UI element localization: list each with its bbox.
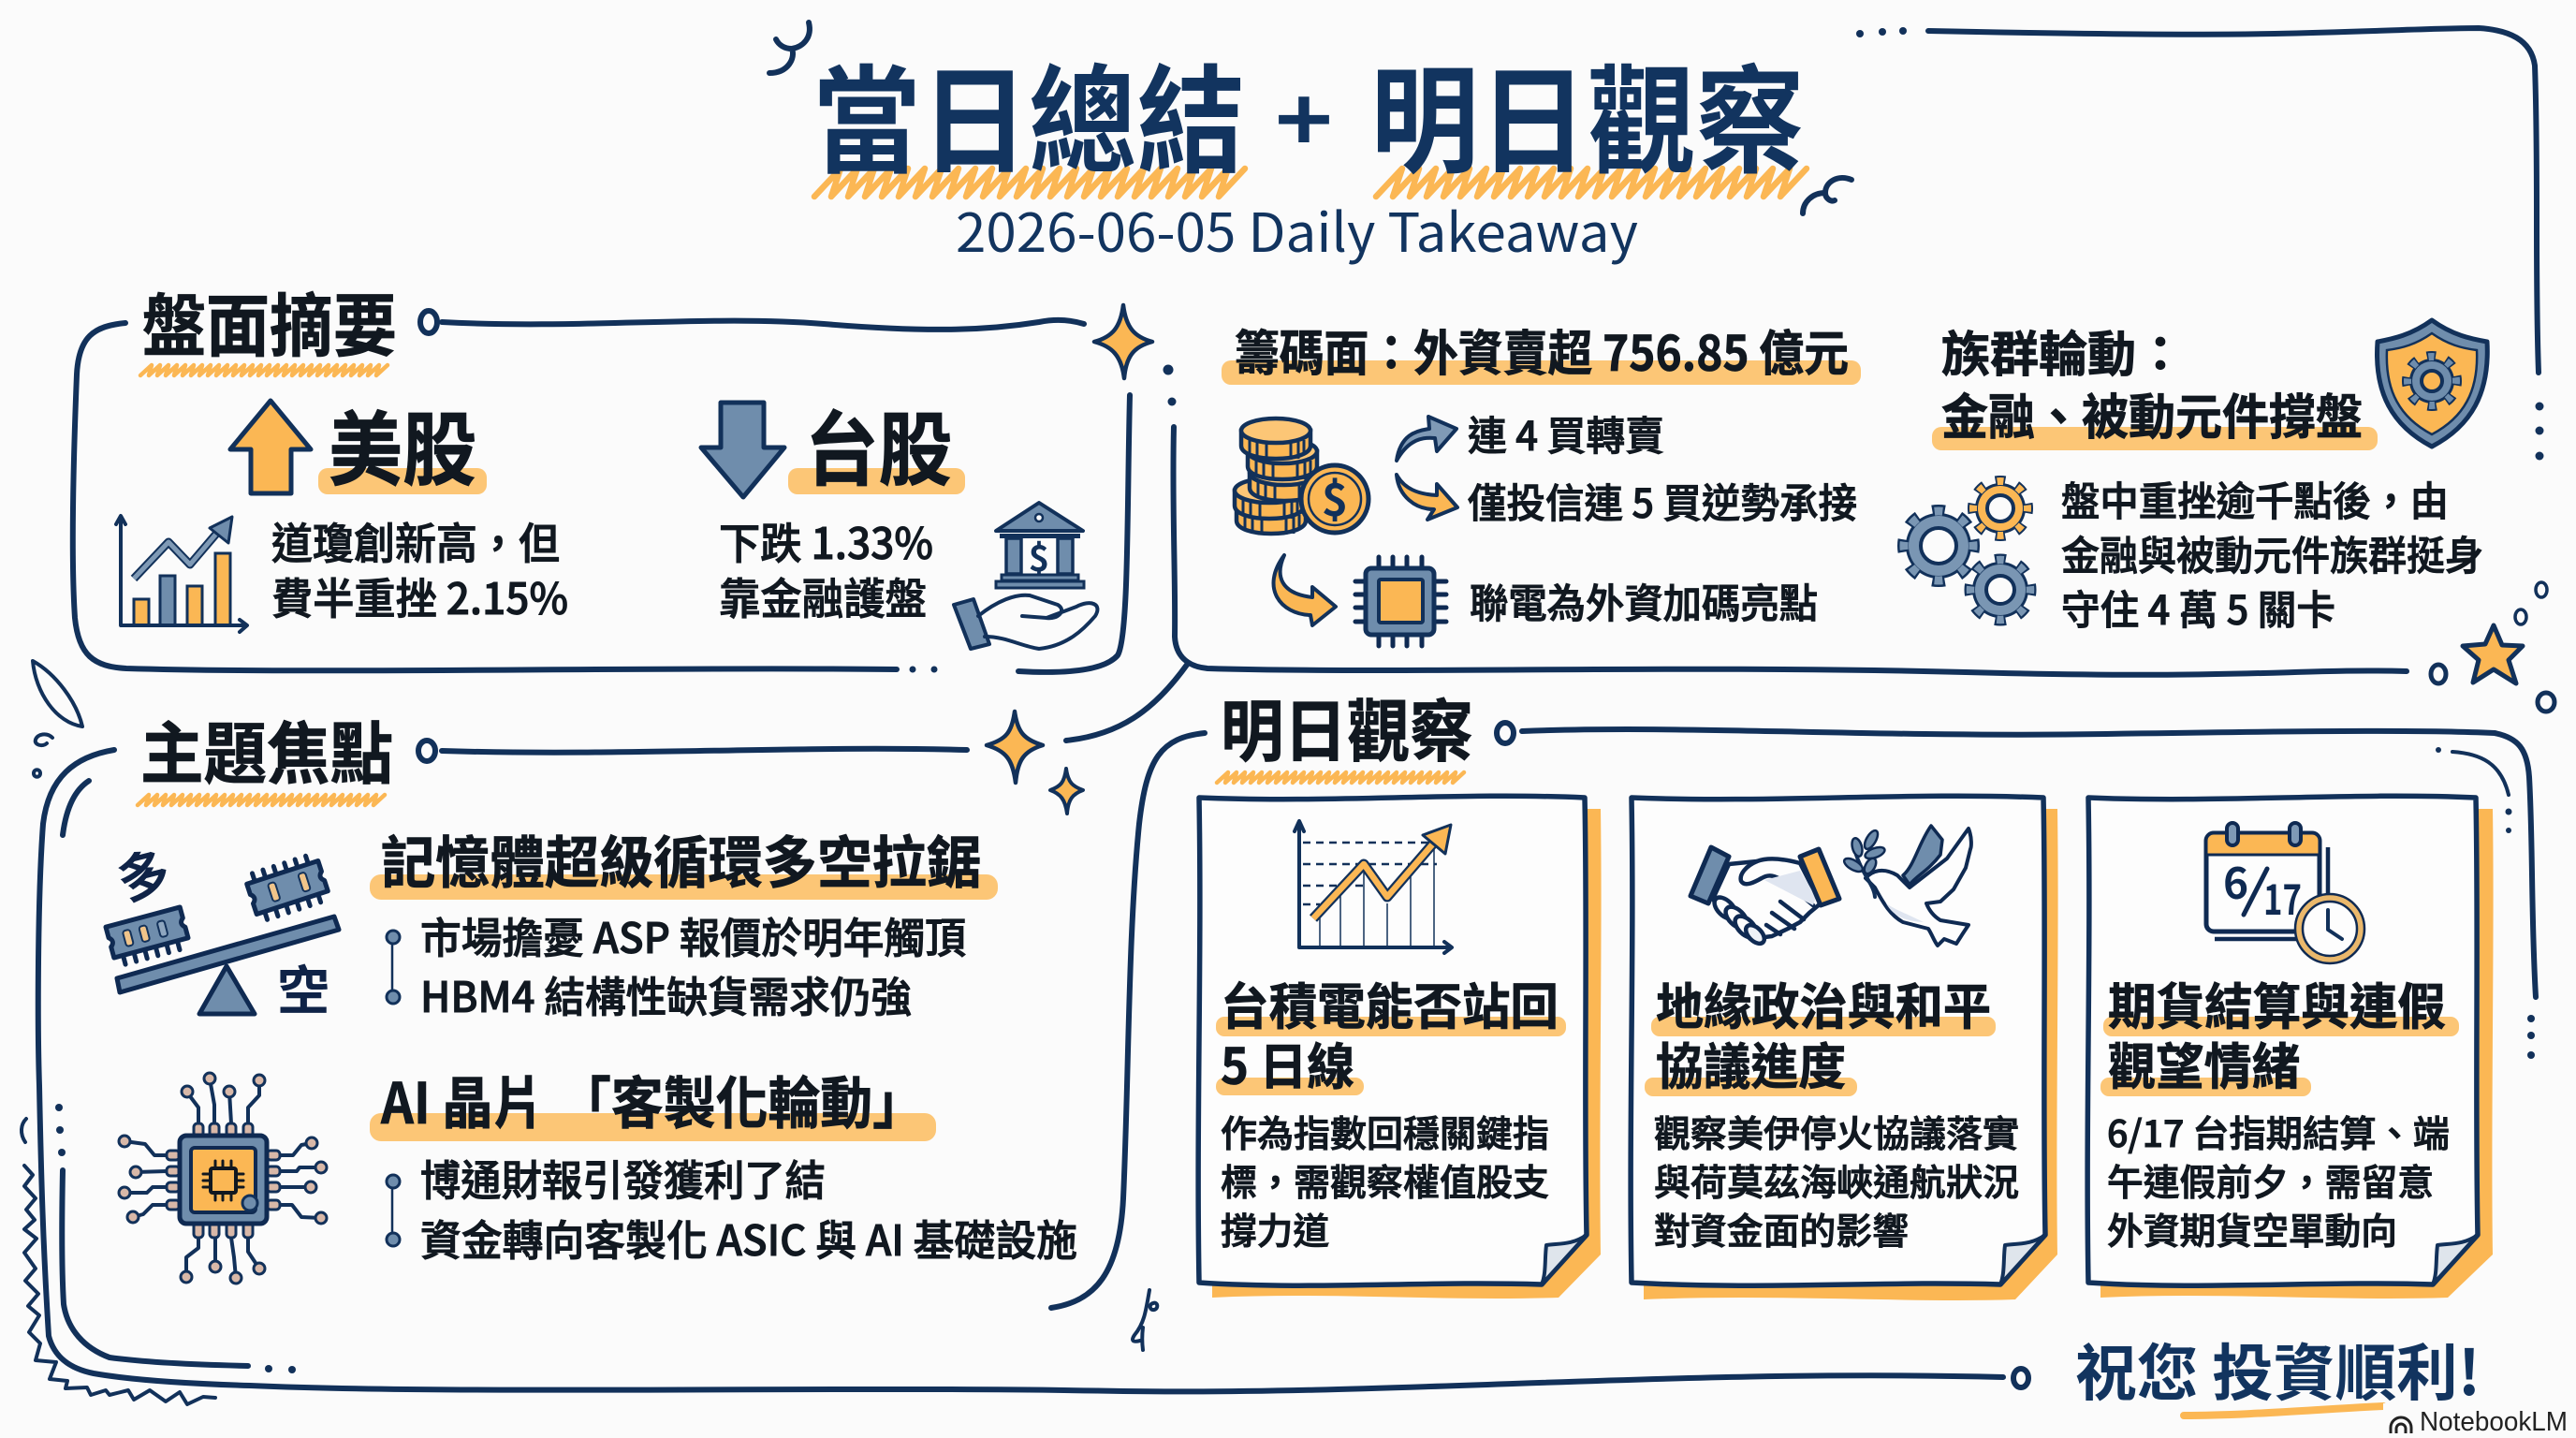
date: 17	[2263, 867, 2302, 927]
timeline bullets	[387, 1175, 400, 1246]
text: TW stocks detail: 靠金融護盤	[719, 565, 927, 627]
card text: 午連假前夕，需留意	[2107, 1154, 2434, 1207]
card text: 作為指數回穩關鍵指	[1221, 1106, 1549, 1158]
icon: bank on hand	[954, 503, 1097, 649]
icon: chip	[1355, 557, 1446, 646]
card text: 標，需觀察權值股支	[1221, 1154, 1549, 1207]
icon: gears	[1904, 481, 2030, 620]
card text: 觀察美伊停火協議落實	[1654, 1106, 2019, 1158]
heading: AI chips	[370, 1059, 936, 1141]
card text: 與荷莫茲海峽通航狀況	[1654, 1154, 2019, 1207]
panel frame	[1173, 427, 2407, 675]
subtitle: 2026-06-05 Daily Takeaway	[956, 191, 1638, 268]
text: sector detail: 守住 4 萬 5 關卡	[2061, 579, 2335, 637]
text: four days: 連 4 買轉賣	[1468, 404, 1664, 462]
label short: 空	[277, 949, 329, 1025]
card text: 外資期貨空單動向	[2107, 1203, 2397, 1255]
card title: 台積電能否站回	[1221, 968, 1559, 1039]
card text	[2107, 1106, 2450, 1255]
panel frame	[73, 323, 1130, 672]
text: memory points: HBM4 結構性缺貨需求仍強	[420, 963, 912, 1024]
top right frame	[1856, 27, 2554, 712]
timeline bullets	[387, 931, 400, 1004]
panel: tomorrow watch	[1198, 677, 2536, 1300]
text: US stocks detail: 道瓊創新高，但	[271, 510, 560, 572]
right boundary curve	[1051, 733, 1205, 1308]
text: US stocks detail: 費半重挫 2.15%	[271, 565, 568, 627]
card text: 撐力道	[1221, 1203, 1329, 1255]
icon: sparkle small	[1050, 769, 1083, 814]
date	[2223, 850, 2302, 927]
text: UMC: 聯電為外資加碼亮點	[1470, 572, 1818, 630]
decorative swirl left	[769, 22, 810, 73]
heading: sector rotation: 金融、被動元件撐盤	[1941, 378, 2363, 448]
heading rule and frame	[1497, 723, 2536, 1059]
panel: theme focus	[22, 661, 2003, 1404]
label: TW stocks: 台股	[805, 385, 952, 502]
title plus: +	[1275, 52, 1333, 177]
panel: chips and rotation	[1163, 315, 2487, 675]
text: trust buying: 僅投信連 5 買逆勢承接	[1468, 472, 1857, 530]
icon: down curved arrow	[1397, 475, 1457, 520]
title underline left	[814, 169, 1245, 197]
text: memory points: 市場擔憂 ASP 報價於明年觸頂	[420, 904, 966, 965]
icon: bank on hand: $	[1029, 530, 1049, 581]
heading: 盤面摘要	[142, 271, 397, 371]
right module	[244, 853, 330, 922]
title left: 當日總結	[812, 27, 1245, 197]
closing message: 祝您 投資順利!	[2075, 1324, 2481, 1414]
heading: memory supercycle: 記憶體超級循環多空拉鋸	[381, 818, 981, 900]
orange shadow	[2100, 809, 2494, 1299]
card title: 地緣政治與和平	[1656, 968, 1991, 1039]
card: geopolitics	[1631, 796, 2058, 1300]
icon: AI chip circuit	[119, 1073, 327, 1284]
title right: 明日觀察	[1370, 27, 1805, 197]
heading rule	[420, 311, 1084, 333]
title	[769, 22, 1852, 268]
icon: sparkle	[1094, 305, 1152, 378]
text: US stocks detail	[271, 510, 568, 627]
watermark	[2383, 1403, 2576, 1438]
heading rule	[418, 741, 967, 761]
card: futures settlement	[2087, 796, 2494, 1299]
left module	[106, 907, 191, 967]
gear: small blue	[1970, 560, 2030, 620]
icon: down arrow	[701, 403, 784, 497]
gear: large blue	[1904, 511, 1973, 580]
card title: 協議進度	[1656, 1028, 1846, 1099]
text: memory points	[420, 904, 966, 1024]
card title	[2100, 968, 2459, 1099]
icon: small circles	[34, 734, 52, 777]
card title: 觀望情緒	[2108, 1028, 2300, 1099]
icon: up arrow	[230, 401, 311, 493]
gear: orange	[1973, 481, 2027, 536]
card: TSMC	[1198, 796, 1602, 1299]
text: AI chip points: 博通財報引發獲利了結	[420, 1147, 826, 1208]
text: AI chip points	[420, 1147, 1077, 1268]
icon: star	[2463, 625, 2523, 683]
card text	[1221, 1106, 1549, 1255]
icon: orange curve arrow	[1274, 555, 1336, 625]
icon: shield	[2377, 320, 2487, 447]
orange shadow	[1644, 809, 2058, 1300]
connector curve	[1066, 665, 1187, 741]
orange shadow	[1212, 809, 1602, 1299]
text: sector detail: 盤中重挫逾千點後，由	[2061, 470, 2449, 528]
date: 6	[2223, 850, 2248, 912]
icon: music note doodle	[1133, 1290, 1157, 1350]
heading: AI chips: 「客製化輪動」	[559, 1059, 925, 1140]
icon: coins: $	[1322, 463, 1348, 529]
label long: 多	[109, 829, 178, 917]
wavy left decoration	[24, 1166, 215, 1404]
card title	[1645, 968, 1996, 1099]
card title: 5 日線	[1221, 1028, 1354, 1099]
icon: up curved arrow	[1397, 417, 1456, 461]
icon: coins	[1235, 418, 1368, 535]
heading: sector rotation	[1932, 315, 2378, 450]
icon: dove	[1842, 826, 1971, 946]
title underline right	[1376, 169, 1807, 197]
text: TW stocks detail: 下跌 1.33%	[719, 510, 933, 572]
panel: market summary	[73, 271, 1152, 672]
heading: AI chips: AI 晶片	[380, 1059, 544, 1140]
card title: 期貨結算與連假	[2108, 968, 2446, 1039]
card title	[1216, 968, 1566, 1099]
icon: calendar and clock	[2206, 823, 2364, 963]
icon: leaf doodle	[33, 661, 82, 726]
heading: sector rotation: 族群輪動：	[1941, 315, 2185, 386]
icon: trend chart	[1295, 821, 1452, 953]
icon: rising chart	[116, 516, 247, 632]
icon: handshake	[1690, 847, 1839, 946]
icon: seesaw with memory modules	[106, 829, 339, 1025]
heading: 主題焦點	[140, 699, 393, 798]
heading: 明日觀察	[1221, 677, 1473, 775]
decorative swirl right	[1803, 178, 1852, 213]
text: AI chip points: 資金轉向客製化 ASIC 與 AI 基礎設施	[420, 1207, 1077, 1268]
text: sector detail	[2061, 470, 2483, 637]
card text: 對資金面的影響	[1654, 1203, 1909, 1255]
heading: chips: 籌碼面：外資賣超 756.85 億元	[1235, 315, 1849, 385]
text: TW stocks detail	[719, 510, 933, 627]
inner frame	[62, 781, 248, 1366]
icon: sparkle large	[987, 712, 1043, 783]
card text: 6/17 台指期結算、端	[2107, 1106, 2450, 1158]
label: US stocks: 美股	[329, 385, 476, 502]
watermark: NotebookLM	[2420, 1407, 2568, 1437]
text: sector detail: 金融與被動元件族群挺身	[2061, 524, 2483, 582]
panel frame	[38, 750, 2003, 1391]
card text	[1654, 1106, 2019, 1255]
